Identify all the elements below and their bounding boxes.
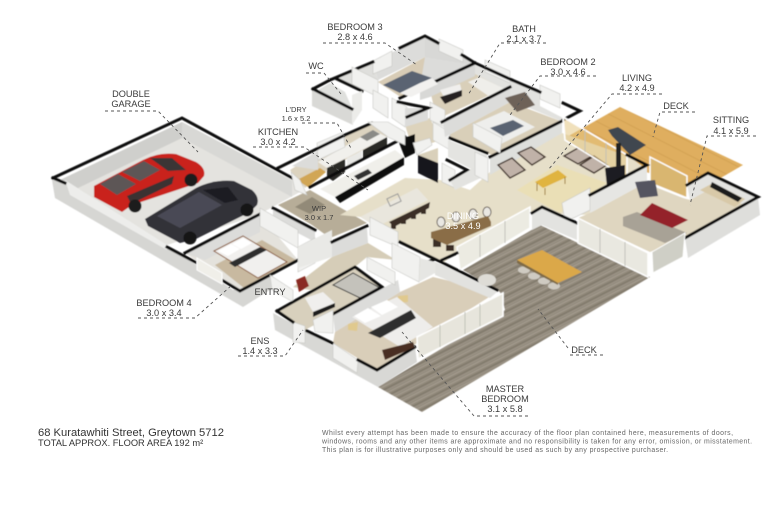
label: master bedroom: 3.1 x 5.8 xyxy=(487,404,523,414)
rug xyxy=(640,203,688,228)
armchairs xyxy=(498,147,607,178)
label: bath xyxy=(468,24,546,95)
label: ensuite: 1.4 x 3.3 xyxy=(242,346,278,356)
kitchen island xyxy=(360,188,428,227)
label: sitting: SITTING xyxy=(713,115,749,125)
label: master bedroom: MASTER xyxy=(486,384,525,394)
room: bath floor xyxy=(430,72,507,117)
desk: bedroom 2 xyxy=(505,92,535,112)
label: ensuite: ENS xyxy=(251,336,269,346)
bar stools xyxy=(389,202,430,229)
label: double garage: DOUBLE xyxy=(112,89,150,99)
label: sitting xyxy=(690,115,756,205)
dining-sitting walls xyxy=(532,207,577,240)
dining sliders xyxy=(457,207,530,270)
car: dark xyxy=(145,181,258,244)
room: living and dining floor xyxy=(340,133,647,263)
bed xyxy=(214,236,287,278)
label: master bedroom xyxy=(402,332,529,416)
label: living: 4.2 x 4.9 xyxy=(619,83,655,93)
label: kitchen: 3.0 x 4.2 xyxy=(260,137,296,147)
room: sitting xyxy=(562,155,760,258)
label: WIP xyxy=(305,204,333,222)
master bed xyxy=(352,297,433,360)
label: ensuite xyxy=(238,330,303,356)
disclaimer: Whilst every attempt has been made to ensure the accuracy of the floor plan contained here, measurements of doors, xyxy=(322,430,733,437)
room: master bedroom xyxy=(273,242,503,387)
label: sitting: 4.1 x 5.9 xyxy=(713,126,749,136)
label: kitchen xyxy=(253,127,368,190)
deck window wall xyxy=(417,293,503,359)
label: double garage xyxy=(105,89,198,152)
label: bedroom 4: BEDROOM 4 xyxy=(136,298,192,308)
disclaimer: windows, rooms and any other items are approximate and no responsibility is taken for any error, omission, or misstatement. xyxy=(321,438,752,446)
window xyxy=(197,258,222,284)
label: WIP: WIP xyxy=(312,204,326,213)
address block: TOTAL APPROX. FLOOR AREA 192 m² xyxy=(38,438,203,448)
label: dining xyxy=(445,211,481,231)
address block xyxy=(38,427,224,448)
floor plan xyxy=(52,36,760,412)
label: entry: ENTRY xyxy=(255,287,285,297)
label: bedroom 2 xyxy=(510,57,596,115)
label: bedroom 2: 3.0 x 4.6 xyxy=(550,67,586,77)
label: double garage: GARAGE xyxy=(111,99,151,109)
label: bedroom 2: BEDROOM 2 xyxy=(540,57,596,67)
label: bedroom 3 xyxy=(323,22,417,65)
label: WC: WC xyxy=(308,61,324,71)
room: double garage xyxy=(52,118,300,307)
room: bedroom 3 floor xyxy=(378,57,473,98)
disclaimer xyxy=(321,430,752,454)
fireplace xyxy=(605,143,625,187)
label: laundry: 1.6 x 5.2 xyxy=(282,114,310,123)
coffee table xyxy=(535,170,567,195)
address block: 68 Kuratawhiti Street, Greytown 5712 xyxy=(38,427,224,439)
car: red xyxy=(94,154,204,212)
label: dining: 3.5 x 4.9 xyxy=(445,221,481,231)
kitchen counter xyxy=(310,134,415,203)
room: entry xyxy=(270,217,398,302)
label: living: LIVING xyxy=(622,73,652,83)
label: bedroom 3: 2.8 x 4.6 xyxy=(337,32,373,42)
label: master bedroom: BEDROOM xyxy=(481,394,529,404)
closet doors xyxy=(260,208,298,248)
glazing: sitting front xyxy=(578,218,685,277)
armchair xyxy=(635,180,658,198)
bed: bedroom 2 xyxy=(472,111,535,144)
label: lower deck xyxy=(538,309,606,355)
room: bedroom 4 xyxy=(167,208,315,291)
sofa xyxy=(623,212,687,243)
fridge xyxy=(413,138,438,183)
bath fittings xyxy=(440,77,507,104)
centre partitions xyxy=(368,87,562,190)
wing walls xyxy=(330,36,580,122)
label: upper deck: DECK xyxy=(663,101,690,111)
label: WIP: 3.0 x 1.7 xyxy=(305,213,333,222)
upper deck furniture xyxy=(608,127,646,155)
dining table xyxy=(431,207,491,251)
label: lower deck: DECK xyxy=(571,345,598,355)
room: bedroom 2 floor xyxy=(445,102,563,155)
hall floor xyxy=(405,118,440,150)
lower timber deck xyxy=(378,225,650,412)
label: bedroom 4 xyxy=(136,285,232,318)
glazing to upper deck xyxy=(563,117,627,178)
label: living xyxy=(548,73,662,170)
partition: bedroom 2 xyxy=(473,123,502,153)
label: bath: BATH xyxy=(512,24,536,34)
label: WC xyxy=(306,61,341,94)
room: ensuite xyxy=(277,267,382,343)
label: dining: DINING xyxy=(447,211,479,221)
room: WIP xyxy=(273,190,367,242)
label: kitchen: KITCHEN xyxy=(258,127,298,137)
label: bedroom 3: BEDROOM 3 xyxy=(327,22,383,32)
deck chair xyxy=(478,274,496,286)
label: laundry: L'DRY xyxy=(285,105,307,114)
label: laundry xyxy=(282,105,352,150)
label: upper deck xyxy=(653,101,695,137)
deck dining table xyxy=(517,250,582,290)
rug: living xyxy=(517,165,607,213)
label: bedroom 4: 3.0 x 3.4 xyxy=(146,308,182,318)
bed: bedroom 3 xyxy=(383,71,438,97)
disclaimer: This plan is for illustrative purposes only and should be used as such by any prospective purchaser. xyxy=(322,447,668,454)
labels and leader lines xyxy=(105,22,756,416)
label: bath: 2.1 x 3.7 xyxy=(506,34,542,44)
upper timber deck xyxy=(565,107,743,190)
room: WC xyxy=(312,67,378,125)
room: laundry xyxy=(278,123,390,195)
